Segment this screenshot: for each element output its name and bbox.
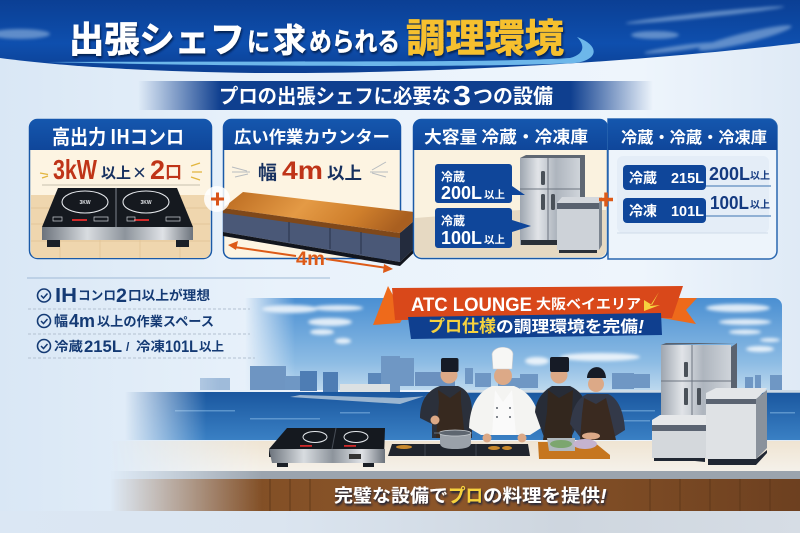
ribbon: ATC Lounge: ATC LOUNGE [411, 295, 532, 316]
card header [413, 119, 608, 150]
sky [245, 298, 782, 390]
skyline [200, 356, 782, 394]
icon: large fridge [520, 155, 585, 245]
icon: chef 3 [535, 357, 585, 440]
callout: freezer capacity: 100L [441, 228, 482, 248]
row: fridge 215L: 以上 [750, 167, 770, 182]
footer slogan: ! [600, 486, 607, 508]
row: freezer 101L: 101L [671, 203, 704, 220]
item: capacity: / [126, 340, 130, 354]
ribbon: subheading [408, 312, 662, 339]
counter top and wooden wall [110, 441, 800, 511]
icon: left freezer [652, 415, 706, 462]
floor [415, 210, 606, 257]
item: work space [38, 311, 214, 331]
plus sign: between fridge and table [599, 192, 613, 206]
subtitle band: つの設備 [473, 80, 553, 109]
title: 調理環境 [406, 8, 564, 64]
footer slogan: プロ [448, 481, 483, 508]
spec text: 口 [165, 158, 182, 183]
spec text [258, 157, 362, 185]
card heading: 大容量 冷蔵・冷凍庫 [424, 123, 588, 148]
ribbon: ATC Lounge [373, 286, 697, 325]
spec text: 以上 [101, 162, 131, 183]
item: work space: 4m [69, 311, 95, 331]
card header [29, 119, 212, 150]
item: capacity [38, 336, 224, 356]
footer slogan: 完璧な設備で [334, 482, 448, 508]
spec text: 3kW [53, 154, 97, 185]
item: IH: IH [55, 285, 77, 307]
item: work space: 以上の作業スペース [97, 311, 214, 330]
subtitle band: 3 [453, 80, 471, 111]
ribbon: subheading: ! [638, 317, 644, 337]
icon: double IH cooktop: 3KW [140, 200, 152, 206]
spec text: 4m [282, 157, 323, 185]
row: fridge 215L: 冷蔵 [629, 168, 657, 188]
callout: freezer capacity: 以上 [484, 232, 505, 247]
arrow: 4m width: 4m [296, 249, 325, 270]
panel: IH cooker [29, 119, 212, 258]
row: freezer 101L [623, 193, 771, 223]
icon: big fridge [661, 343, 737, 417]
item: capacity: 冷蔵 [54, 336, 83, 355]
item: capacity: 215L [84, 337, 122, 356]
plus sign: between IH and counter [204, 186, 230, 212]
spec text: × [132, 162, 147, 183]
icon: pot [434, 430, 471, 449]
card heading: 広い作業カウンター [234, 123, 390, 148]
card heading: 冷蔵・冷蔵・冷凍庫 [621, 124, 767, 148]
header banner [0, 0, 800, 73]
panel: work counter [223, 119, 423, 273]
swoosh accent [48, 37, 594, 66]
callout: freezer capacity: 冷蔵 [441, 212, 465, 229]
item: IH [38, 285, 210, 307]
spec text [53, 154, 182, 185]
row: freezer 101L: 冷凍 [629, 201, 657, 221]
icon: right freezer [706, 388, 767, 465]
row: fridge 215L [623, 164, 771, 190]
panel: fridge and freezer [413, 119, 608, 258]
card header [608, 119, 777, 150]
title: められる [309, 22, 400, 59]
item: work space: 幅 [54, 311, 68, 331]
icon: wooden counter [223, 192, 423, 266]
item: capacity: 以上 [199, 336, 224, 355]
footer slogan: の料理を提供 [483, 482, 600, 508]
callout: fridge capacity [435, 164, 525, 203]
icon: small freezer [557, 197, 602, 253]
ribbon: subheading: の調理環境を完備 [496, 313, 638, 337]
row: fridge 215L: 200L [709, 164, 750, 184]
callout: fridge capacity: 冷蔵 [441, 168, 465, 185]
callout: fridge capacity: 以上 [484, 187, 505, 202]
icon: chef 4 [570, 367, 625, 440]
icon: cooktop on counter [269, 428, 385, 467]
title: 出張シェフ [69, 11, 245, 63]
arrow: 4m width [228, 241, 393, 273]
icon: chef 1 [420, 358, 472, 438]
background scene: bay area [116, 298, 800, 533]
icon: griddle [388, 444, 530, 456]
spec text: 以上 [327, 159, 362, 184]
subtitle band: プロの出張シェフに必要な [219, 80, 451, 109]
sea [125, 390, 800, 440]
row: freezer 101L: 以上 [750, 196, 770, 211]
ribbon: ATC Lounge: 大阪ベイエリア [536, 294, 641, 314]
ribbon: subheading: プロ仕様 [428, 312, 496, 337]
subtitle band [138, 80, 653, 111]
header clouds [0, 4, 793, 55]
callout: fridge capacity: 200L [441, 183, 482, 203]
item: capacity: 101L [165, 337, 198, 356]
title: 求 [273, 14, 306, 62]
panel: capacity comparison [608, 119, 777, 259]
item: IH: 2 [116, 286, 127, 307]
icon: double IH cooktop: 3KW [79, 200, 91, 206]
item: IH: 口以上が理想 [128, 285, 210, 304]
spec text: 2 [150, 155, 165, 185]
item: IH: コンロ [78, 285, 116, 304]
floor tiles [31, 195, 210, 258]
row: freezer 101L: 100L [710, 193, 749, 213]
card header [223, 119, 401, 150]
card heading: 高出力 IHコンロ [52, 121, 184, 150]
spec text: 幅 [258, 158, 277, 185]
title [69, 8, 564, 64]
icon: head chef [469, 347, 541, 442]
title: に [247, 22, 270, 59]
item: capacity: 冷凍 [136, 336, 165, 355]
icon: cutting board with food [538, 438, 610, 459]
icon: double IH cooktop [42, 188, 193, 247]
footer slogan [334, 481, 607, 508]
check list [28, 285, 255, 358]
callout: freezer capacity [435, 208, 531, 248]
row: fridge 215L: 215L [671, 170, 704, 187]
